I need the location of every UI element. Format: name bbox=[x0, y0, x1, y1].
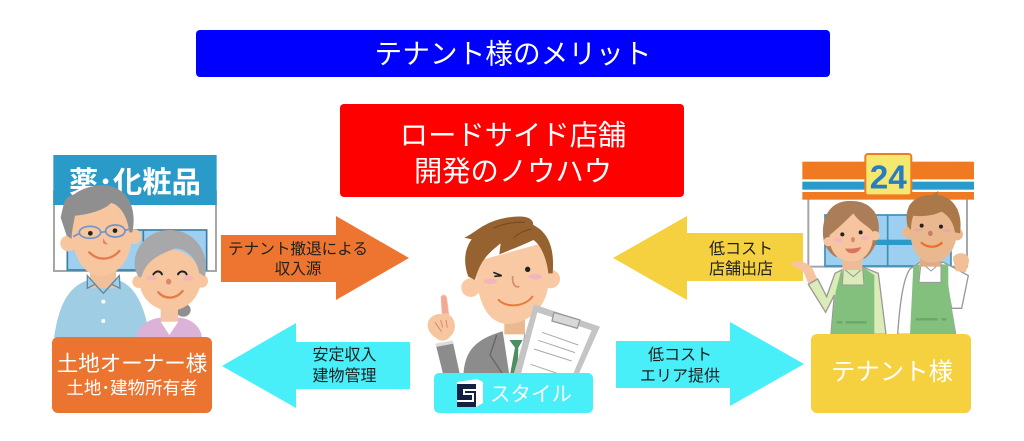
arrow: tenant withdrawal income bbox=[221, 216, 409, 300]
arrow: low cost store opening: 店舗出店 bbox=[709, 260, 773, 278]
style company label bbox=[434, 373, 593, 413]
icon: drugstore building: 薬･化粧品 bbox=[69, 167, 201, 200]
icon: pointing hand bbox=[428, 294, 455, 341]
land owner label bbox=[52, 337, 212, 413]
tenant label bbox=[811, 334, 971, 413]
title banner bbox=[196, 30, 830, 77]
icon: suit body bbox=[435, 331, 525, 375]
arrow: tenant withdrawal income: 収入源 bbox=[275, 260, 322, 278]
illustration: winking consultant bbox=[428, 216, 600, 377]
land owner label: 土地･建物所有者 bbox=[66, 378, 198, 398]
arrow: tenant withdrawal income: テナント撤退による bbox=[228, 240, 368, 258]
title banner: テナント様のメリット bbox=[375, 38, 651, 70]
arrow: low cost store opening bbox=[613, 216, 803, 300]
illustration: drugstore and land owner couple bbox=[53, 155, 217, 338]
style company label: スタイル bbox=[490, 383, 572, 406]
arrow: stable income, building management: 建物管理 bbox=[312, 367, 377, 385]
arrow: low cost store opening: 低コスト bbox=[709, 240, 773, 258]
icon: head bbox=[461, 216, 560, 334]
icon: 24h store bbox=[802, 154, 974, 267]
tenant label: テナント様 bbox=[831, 359, 953, 386]
icon: elderly woman bbox=[132, 230, 208, 338]
arrow: stable income, building management bbox=[222, 323, 410, 408]
illustration: convenience store and tenant staff bbox=[791, 154, 974, 334]
red box: roadside store know-how bbox=[340, 104, 684, 197]
icon: male staff bbox=[898, 191, 969, 334]
icon: clipboard bbox=[513, 304, 600, 377]
red box: roadside store know-how: ロードサイド店舗 bbox=[400, 119, 626, 151]
arrow: low cost area provision bbox=[616, 322, 804, 406]
icon: 24h store: 24 bbox=[870, 159, 907, 196]
land owner label: 土地オーナー様 bbox=[57, 352, 207, 376]
icon: female staff bbox=[791, 201, 886, 334]
icon: S logo cube bbox=[457, 379, 483, 407]
arrow: stable income, building management: 安定収入 bbox=[312, 346, 377, 364]
red box: roadside store know-how: 開発のノウハウ bbox=[414, 155, 612, 187]
arrow: low cost area provision: 低コスト bbox=[648, 346, 712, 364]
arrow: low cost area provision: エリア提供 bbox=[640, 367, 720, 385]
icon: drugstore building bbox=[53, 155, 217, 271]
icon: elderly man bbox=[54, 185, 150, 338]
